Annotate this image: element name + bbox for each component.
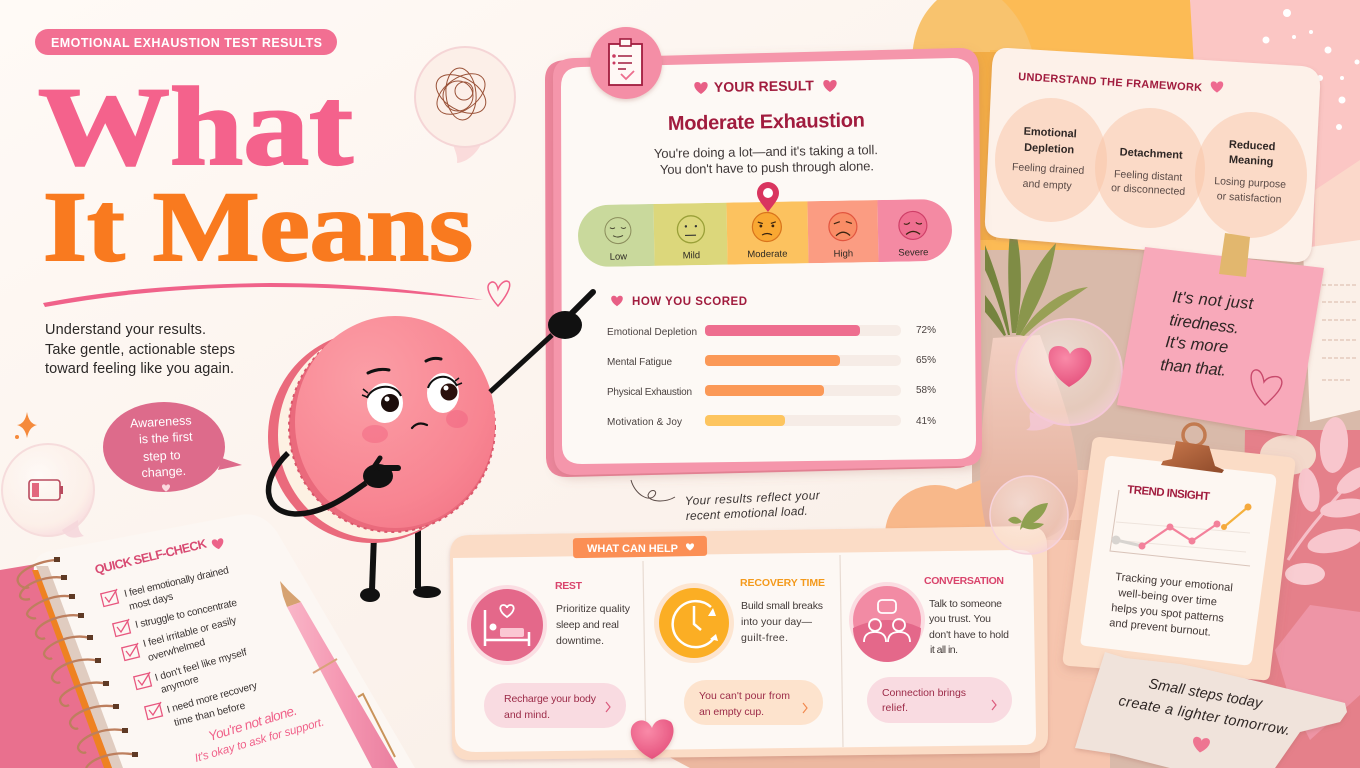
rest text: sleep and real	[556, 619, 619, 631]
sticky note	[1117, 233, 1324, 436]
pen	[280, 581, 398, 768]
circle text: emotional depletion	[1012, 126, 1085, 192]
tape	[1219, 233, 1250, 277]
rest text: downtime.	[556, 635, 604, 647]
result description	[654, 142, 878, 177]
bubble: low battery	[2, 444, 94, 538]
gauge face: mild: Mild	[683, 250, 700, 261]
checklist items: anymore	[160, 674, 200, 696]
recovery text: Build small breaks	[741, 600, 823, 612]
note text: tiredness.	[1169, 311, 1240, 338]
recovery pill: You can't pour from	[699, 690, 790, 702]
speech bubble: awareness: step to	[143, 448, 181, 464]
speech bubble: awareness: change.	[141, 464, 186, 480]
checklist items: most days	[128, 591, 174, 613]
bar chart: scores: 41%	[916, 416, 936, 427]
intro text: Take gentle, actionable steps	[45, 342, 235, 358]
circle text: detachment	[1111, 146, 1186, 198]
spiral binding	[18, 560, 136, 768]
circle text: emotional depletion: Feeling drained	[1012, 161, 1085, 177]
notebook page	[34, 514, 415, 768]
handwritten support note: It's okay to ask for support.	[194, 716, 326, 765]
trend text: Tracking your emotional	[1115, 571, 1233, 594]
icon: people talking	[849, 582, 925, 662]
circle text: detachment: Feeling distant	[1114, 168, 1183, 184]
icon: location pin	[757, 182, 779, 212]
note text: Small steps today	[1147, 676, 1264, 712]
circle text: reduced meaning	[1214, 139, 1286, 206]
result description: You don't have to push through alone.	[660, 158, 874, 177]
tag: emotional exhaustion test results: EMOTIONAL EXHAUSTION TEST RESULTS	[51, 36, 322, 50]
checklist items: overwhelmed	[147, 637, 207, 664]
bubble: leaf	[990, 476, 1068, 554]
severity gauge	[577, 199, 953, 267]
gauge face: severe: Severe	[898, 247, 929, 259]
bar chart: scores: Motivation & Joy	[607, 417, 682, 428]
gauge face: high: High	[834, 248, 853, 260]
character eyes	[362, 373, 462, 423]
circle text: reduced meaning: Reduced	[1229, 139, 1276, 153]
rest title: REST	[555, 580, 583, 592]
torn paper note	[1075, 652, 1347, 768]
circle text: emotional depletion: and empty	[1022, 178, 1073, 192]
title underline with heart	[43, 281, 510, 307]
tag: what can help	[573, 536, 707, 558]
clipboard paper	[1081, 456, 1276, 665]
circle text: detachment: or disconnected	[1111, 182, 1186, 198]
clip	[1161, 424, 1224, 473]
checklist items: I don't feel like myself	[154, 647, 248, 684]
gauge face: moderate: Moderate	[747, 249, 788, 260]
icon: bed	[467, 585, 547, 665]
conversation pill	[867, 677, 1012, 723]
arrow	[631, 480, 675, 501]
bar chart: scores: Emotional Depletion	[607, 327, 697, 338]
panel: main result card	[545, 27, 982, 477]
character cheeks	[362, 410, 468, 443]
conversation text: Talk to someone	[929, 598, 1002, 610]
recovery text	[741, 600, 823, 644]
rest text	[556, 603, 631, 647]
checklist items: I feel irritable or easily	[142, 615, 239, 650]
card: conversation	[849, 575, 1012, 723]
your result heading: YOUR RESULT	[714, 77, 815, 95]
speech bubble: awareness	[103, 402, 242, 492]
rest text: Prioritize quality	[556, 603, 631, 615]
recovery title: RECOVERY TIME	[740, 577, 825, 589]
circle text: reduced meaning: Losing purpose	[1214, 175, 1286, 191]
conversation text	[929, 598, 1009, 656]
checklist items: I need more recovery	[166, 680, 259, 716]
note text: create a lighter tomorrow.	[1117, 693, 1291, 739]
gauge face: severe	[898, 211, 929, 259]
left arm on chin	[269, 453, 398, 514]
note text	[1160, 288, 1255, 380]
title: It Means	[43, 171, 473, 282]
gauge face: mild	[677, 216, 705, 262]
bar chart: scores: 72%	[916, 325, 936, 336]
recovery text: guilt-free.	[741, 632, 788, 644]
trend heading: TREND INSIGHT	[1127, 484, 1210, 503]
recovery pill	[684, 680, 823, 725]
bubble: tangled thoughts	[415, 47, 515, 163]
speech bubble: awareness: Awareness	[130, 413, 192, 431]
bar chart: scores: 58%	[916, 385, 936, 396]
bar chart: scores: 65%	[916, 355, 936, 366]
icon: 3d heart	[631, 719, 674, 759]
conversation text: it all in.	[930, 644, 958, 656]
checklist items: I struggle to concentrate	[134, 598, 239, 631]
leaf branch	[1285, 416, 1360, 585]
sparkle icons	[15, 412, 37, 439]
conversation text: don't have to hold	[929, 629, 1009, 641]
macaron bottom shell	[268, 331, 476, 543]
background handwritten paper	[1303, 240, 1360, 422]
checklist items: I feel emotionally drained	[123, 565, 230, 600]
icon: clipboard badge	[590, 27, 662, 99]
bar chart: scores: Physical Exhaustion	[607, 387, 692, 398]
character feet	[360, 586, 441, 602]
character legs	[372, 530, 418, 590]
trend text: and prevent burnout.	[1109, 617, 1211, 639]
conversation text: you trust. You	[929, 613, 991, 625]
gauge face: low: Low	[610, 251, 627, 263]
icon: outline heart	[1251, 370, 1282, 405]
handwritten support note: You're not alone.	[206, 703, 299, 744]
circle text: reduced meaning: Meaning	[1229, 154, 1274, 168]
background collage: right side shapes	[660, 0, 1360, 768]
note text: It's more	[1165, 333, 1229, 356]
checklist items	[123, 565, 259, 729]
card: rest	[467, 580, 631, 728]
panel: understand the framework	[985, 48, 1320, 262]
bar chart: scores: Mental Fatigue	[607, 357, 672, 368]
conversation pill: Connection brings	[882, 687, 966, 699]
how you scored heading: HOW YOU SCORED	[632, 296, 747, 308]
conversation title: CONVERSATION	[924, 575, 1004, 587]
icon: heart	[1192, 736, 1210, 754]
character eyebrows and mouth	[368, 358, 441, 428]
trend text	[1109, 571, 1233, 639]
macaron top shell	[289, 316, 495, 532]
notebook cover	[0, 564, 140, 768]
macaron character	[268, 292, 593, 602]
vase	[980, 335, 1078, 540]
circle text: emotional depletion: Emotional	[1023, 126, 1077, 140]
recovery text: into your day—	[741, 616, 812, 628]
note text	[685, 488, 821, 523]
macaron cream	[278, 331, 478, 539]
framework heading: UNDERSTAND THE FRAMEWORK	[1018, 71, 1203, 94]
trend text: helps you spot patterns	[1111, 602, 1225, 625]
note text: than that.	[1160, 356, 1227, 380]
framework circles	[995, 98, 1307, 238]
spiral holes	[54, 557, 138, 757]
note text: Your results reflect your	[685, 488, 821, 508]
panel: what can help	[450, 526, 1048, 760]
bubble: heart	[1016, 319, 1122, 431]
card: recovery time	[654, 577, 825, 725]
plant	[985, 215, 1088, 336]
circle text: emotional depletion: Depletion	[1024, 142, 1075, 156]
trend text: well-being over time	[1117, 587, 1217, 608]
circle text: reduced meaning: or satisfaction	[1216, 190, 1282, 206]
note text: recent emotional load.	[686, 504, 808, 523]
title: What	[38, 65, 353, 189]
right arm pointing	[490, 292, 593, 392]
tag: what can help: WHAT CAN HELP	[587, 543, 678, 555]
gauge face: moderate	[747, 212, 788, 260]
title	[38, 65, 473, 282]
rest pill: and mind.	[504, 709, 550, 721]
gauge face: low	[605, 217, 631, 263]
checklist boxes	[101, 589, 162, 719]
checklist heading: QUICK SELF-CHECK	[93, 536, 209, 577]
recovery pill: an empty cup.	[699, 706, 764, 718]
notebook: quick self-check	[0, 514, 415, 768]
checklist items: time than before	[173, 700, 247, 729]
intro text: toward feeling like you again.	[45, 361, 234, 377]
rest pill: Recharge your body	[504, 693, 597, 705]
result title: Moderate Exhaustion	[668, 110, 865, 135]
intro text	[45, 322, 235, 377]
conversation pill: relief.	[882, 702, 908, 714]
rest pill	[484, 683, 626, 728]
result description: You're doing a lot—and it's taking a toll.	[654, 142, 878, 161]
icon: clock	[654, 583, 734, 663]
speech bubble: awareness: is the first	[139, 430, 193, 446]
circle text: detachment: Detachment	[1119, 146, 1183, 162]
note text: It's not just	[1172, 288, 1255, 313]
tag: emotional exhaustion test results	[35, 29, 337, 55]
gauge face: high	[829, 212, 857, 260]
arrow note	[631, 480, 821, 523]
clipboard: trend insight	[1063, 424, 1295, 680]
bar chart: scores	[607, 325, 936, 428]
line chart	[1110, 490, 1252, 566]
intro text: Understand your results.	[45, 322, 206, 338]
